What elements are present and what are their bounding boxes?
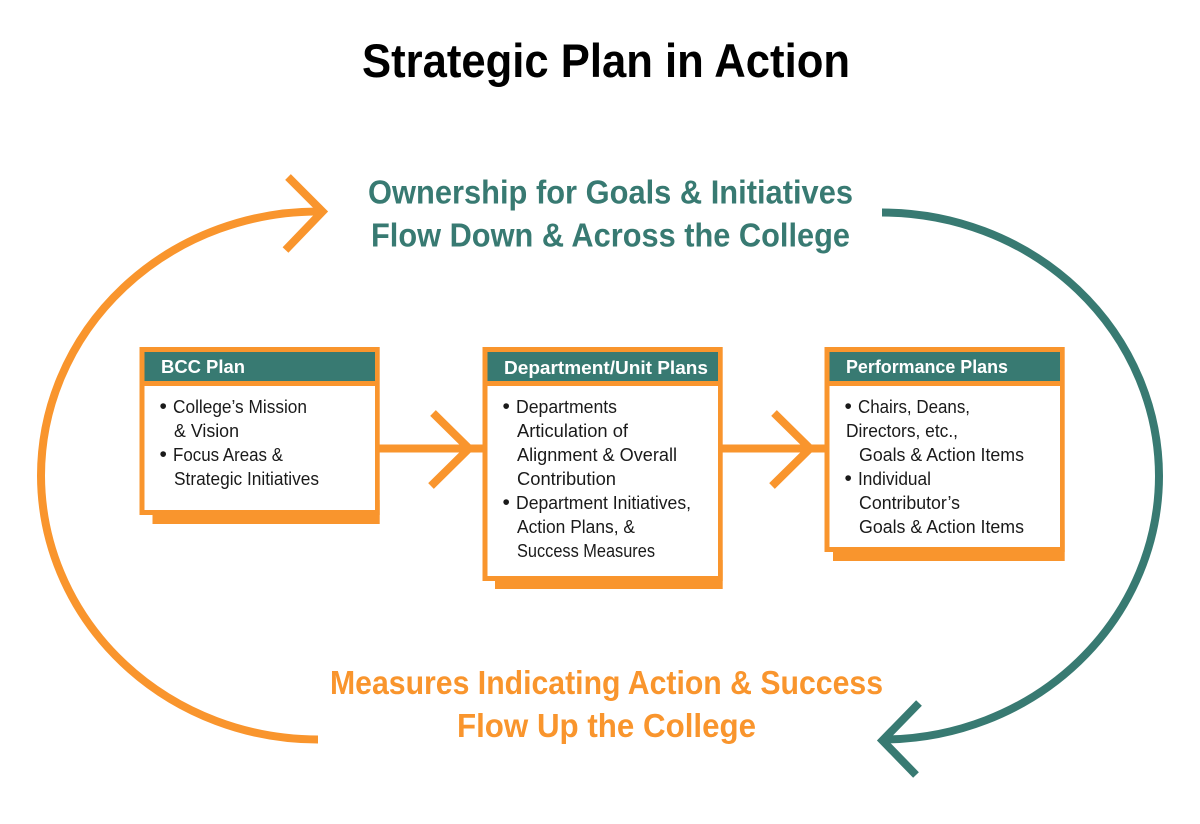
panel: Performance Plans xyxy=(824,347,1065,561)
text block: Performance Plans bullets: Goals & Action Items xyxy=(859,445,1024,465)
text block: BCC Plan bullets: College’s Mission xyxy=(173,397,307,417)
text block: Department/Unit Plans bullets: Success Measures xyxy=(517,541,655,561)
arrow: department plans to performance plans xyxy=(720,413,826,486)
arrow: orange loop up the left side xyxy=(41,177,322,740)
arrow: teal loop down the right side xyxy=(882,212,1159,775)
text block: Department/Unit Plans bullets: Alignment & Overall xyxy=(517,445,677,465)
text block: Performance Plans bullets: Contributor’s xyxy=(859,493,960,513)
text block: BCC Plan bullets: & Vision xyxy=(174,421,239,441)
text block: Performance Plans bullets: Directors, etc., xyxy=(846,421,958,441)
text block: Performance Plans bullets xyxy=(844,395,1024,537)
text block: Performance Plans bullets: Individual xyxy=(858,469,931,489)
text block: Department/Unit Plans bullets: • xyxy=(502,491,510,514)
text block: Department/Unit Plans bullets: Action Plans, & xyxy=(517,517,635,537)
heading: measures flow up xyxy=(330,665,883,745)
panel heading: BCC Plan: BCC Plan xyxy=(161,356,245,377)
text block: BCC Plan bullets xyxy=(160,395,319,489)
text block: Department/Unit Plans bullets: Departments xyxy=(516,397,617,417)
text block: Department/Unit Plans bullets: Contribution xyxy=(517,469,616,489)
text block: Performance Plans bullets: Chairs, Deans, xyxy=(858,397,970,417)
text block: Department/Unit Plans bullets: Articulation of xyxy=(517,421,629,441)
heading: ownership flows down xyxy=(368,174,853,254)
text block: BCC Plan bullets: Focus Areas & xyxy=(173,445,283,465)
panel: BCC Plan xyxy=(140,347,380,524)
text block: Department/Unit Plans bullets: Department Initiatives, xyxy=(516,493,691,513)
arrow: BCC plan to department plans xyxy=(378,413,484,486)
text block: Performance Plans bullets: • xyxy=(844,467,852,490)
panel heading: Performance Plans: Performance Plans xyxy=(846,356,1008,377)
heading: measures flow up: Measures Indicating Action & Success xyxy=(330,665,883,702)
panel heading: Department/Unit Plans: Department/Unit Plans xyxy=(504,357,708,378)
text block: Performance Plans bullets: Goals & Action Items xyxy=(859,517,1024,537)
text block: BCC Plan bullets: Strategic Initiatives xyxy=(174,469,319,489)
text block: BCC Plan bullets: • xyxy=(160,395,167,418)
heading: measures flow up: Flow Up the College xyxy=(457,708,756,745)
heading: ownership flows down: Flow Down & Across the College xyxy=(371,218,850,254)
heading: ownership flows down: Ownership for Goals & Initiatives xyxy=(368,174,853,212)
text block: Department/Unit Plans bullets: • xyxy=(502,395,510,418)
text block: Department/Unit Plans bullets xyxy=(502,395,691,561)
text block: BCC Plan bullets: • xyxy=(160,443,167,466)
title: Strategic Plan in Action xyxy=(362,34,850,87)
panel: Department/Unit Plans xyxy=(482,347,723,589)
text block: Performance Plans bullets: • xyxy=(844,395,852,418)
